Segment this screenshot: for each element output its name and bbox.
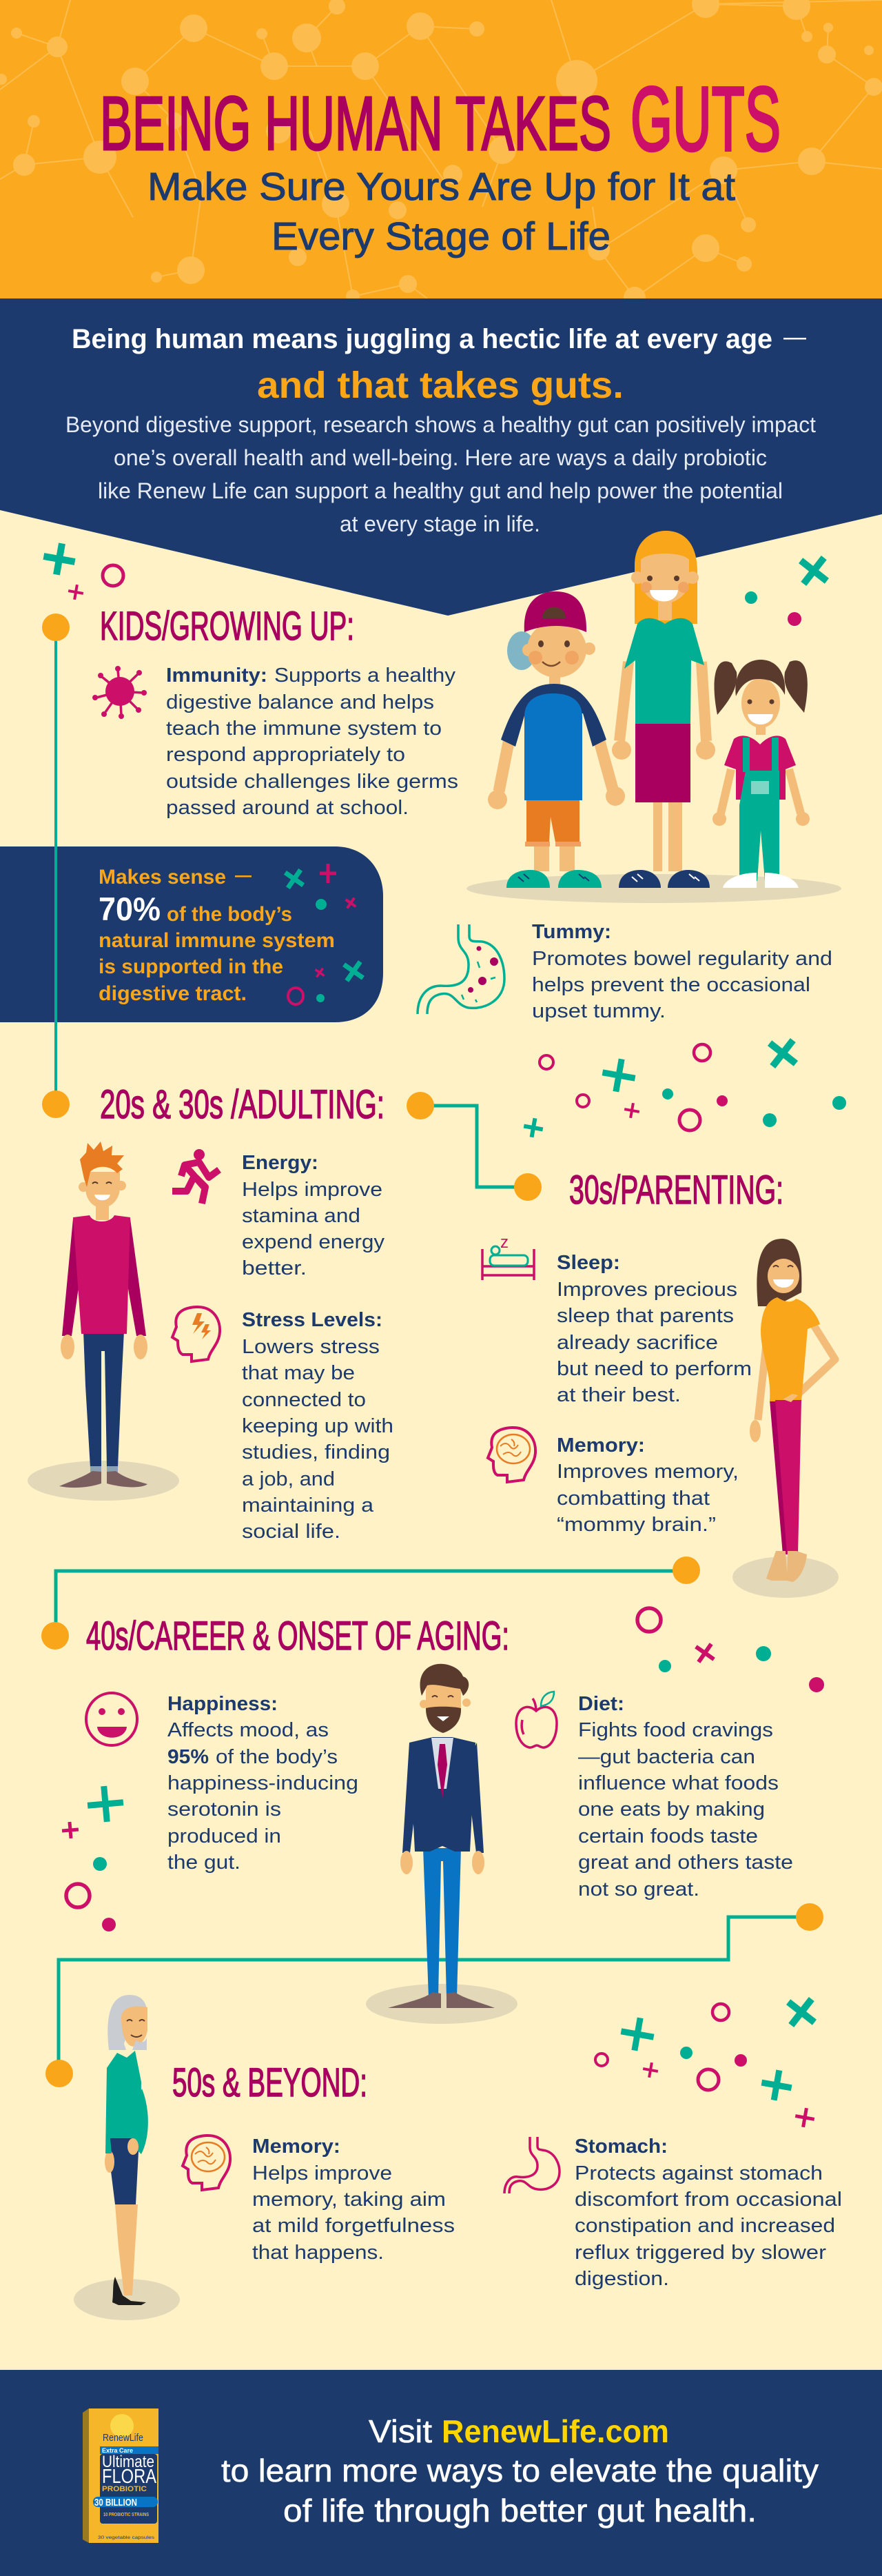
icon: tummy (418, 924, 504, 1014)
text: sleep: Sleep: (557, 1252, 620, 1274)
callout text: Makes sense (99, 866, 226, 889)
text: memory: “mommy brain.” (557, 1514, 716, 1536)
text: immunity: outside challenges like germs (166, 771, 458, 793)
nodes (41, 1556, 823, 1931)
section: 20s and 30s adulting (28, 1082, 434, 1543)
text: immunity: respond appropriately to (166, 744, 405, 766)
text: stress levels: social life. (242, 1521, 340, 1543)
callout text: natural immune system (99, 929, 335, 952)
decorative symbols: top right (745, 547, 837, 626)
node (42, 613, 70, 641)
text: happiness: Happiness: (167, 1693, 278, 1715)
text: diet (578, 1693, 793, 1900)
text: stomach: constipation and increased (575, 2215, 835, 2237)
intro paragraph: Beyond digestive support, research shows a healthy gut can positively impact (65, 412, 816, 437)
intro headline: Being human means juggling a hectic life at every age (72, 324, 772, 354)
text: diet: Fights food cravings (578, 1719, 773, 1741)
molecule network background (0, 0, 882, 309)
text: stress levels: studies, finding (242, 1441, 390, 1463)
icon: stomach (504, 2137, 560, 2193)
decorative symbols: left (61, 1785, 125, 1931)
icon: stressed head (172, 1307, 220, 1361)
boy (488, 591, 625, 888)
text: sleep: sleep that parents (557, 1305, 734, 1327)
text: memory (252, 2136, 455, 2264)
text: immunity: teach the immune system to (166, 718, 442, 740)
text: immunity (166, 665, 458, 819)
decorative symbols: right (637, 1608, 824, 1692)
text: happiness (167, 1693, 358, 1874)
text: immunity: Immunity: (166, 665, 267, 687)
icon: germ (92, 666, 147, 719)
text: stress levels: Lowers stress (242, 1336, 380, 1358)
text: stomach (575, 2136, 842, 2290)
subtitle: Make Sure Yours Are Up for It at (147, 165, 735, 209)
heading: KIDS/GROWING UP: (100, 604, 354, 649)
text: stomach: discomfort from occasional (575, 2189, 842, 2211)
intro paragraph: like Renew Life can support a healthy gut and help power the potential (98, 478, 783, 503)
section: 40s career and onset of aging (41, 1556, 824, 2024)
text: energy: Helps improve (242, 1179, 382, 1201)
title: GUTS (630, 68, 781, 170)
text: happiness: serotonin is (167, 1798, 281, 1821)
text: happiness: happiness-inducing (167, 1772, 358, 1794)
text: energy: better. (242, 1257, 307, 1279)
decorative symbols: upper middle (522, 1030, 846, 1139)
intro paragraph: one’s overall health and well-being. Here are ways a daily probiotic (114, 445, 767, 470)
text: immunity: digestive balance and helps (166, 691, 434, 713)
illustration: family (466, 531, 841, 903)
text: stress levels: that may be (242, 1362, 355, 1384)
text: stomach: reflux triggered by slower (575, 2242, 826, 2264)
call to action: to learn more ways to elevate the quality (221, 2453, 819, 2488)
nodes (42, 1091, 434, 1119)
product box (83, 2408, 158, 2543)
text: stress levels: a job, and (242, 1468, 335, 1490)
text: diet: Diet: (578, 1693, 624, 1715)
text: happiness: produced in (167, 1825, 281, 1847)
heading: 40s/CAREER & ONSET OF AGING: (86, 1614, 509, 1659)
icon: running (172, 1149, 219, 1204)
text: memory: Helps improve (252, 2162, 392, 2184)
illustration: mother in orange (732, 1239, 839, 1598)
text: stress levels: connected to (242, 1389, 366, 1411)
text: diet: certain foods taste (578, 1825, 758, 1847)
call to action: of life through better gut health. (283, 2493, 757, 2528)
text: immunity: passed around at school. (166, 797, 409, 819)
callout text (99, 866, 335, 1005)
panel: header banner (0, 0, 882, 309)
callout text: is supported in the (99, 955, 283, 978)
panel: intro (0, 298, 882, 616)
node (514, 1173, 542, 1201)
text: memory: Memory: (557, 1434, 645, 1457)
text: diet: not so great. (578, 1878, 699, 1900)
section: 30s parenting (482, 1168, 839, 1598)
heading: 20s & 30s /ADULTING: (100, 1082, 384, 1127)
product box: 30 BILLION (94, 2497, 137, 2508)
product box: Ultimate (102, 2453, 154, 2471)
text: sleep (557, 1252, 752, 1406)
callout: 70 percent (0, 846, 383, 1022)
product box: 30 vegetable capsules (98, 2536, 154, 2540)
text: energy (242, 1152, 385, 1279)
icon: brain head (183, 2136, 230, 2190)
text: happiness: 95% (167, 1746, 209, 1768)
text: stomach: Protects against stomach (575, 2162, 823, 2184)
call to action: Visit (369, 2413, 432, 2449)
heading: 30s/PARENTING: (569, 1168, 783, 1213)
callout text: digestive tract. (99, 982, 247, 1005)
text: stress levels: maintaining a (242, 1494, 374, 1517)
icon: bed: z (500, 1233, 509, 1252)
subtitle (147, 165, 735, 258)
product box: PROBIOTIC (102, 2485, 147, 2493)
illustration: man in suit (366, 1664, 517, 2024)
text: immunity: Supports a healthy (274, 665, 456, 687)
icon: apple (516, 1692, 557, 1747)
text: sleep: but need to perform (557, 1358, 752, 1380)
callout symbols (279, 864, 370, 1004)
intro paragraph: at every stage in life. (340, 511, 540, 536)
text: happiness: Affects mood, as (167, 1719, 329, 1741)
text: happiness: the gut. (167, 1852, 240, 1874)
text: tummy: upset tummy. (532, 1000, 666, 1022)
text: tummy: helps prevent the occasional (532, 974, 810, 996)
text: sleep: at their best. (557, 1384, 681, 1406)
text: tummy: Tummy: (532, 921, 611, 943)
icon: brain head (488, 1428, 535, 1482)
panel: footer (0, 2370, 882, 2576)
text: stomach: digestion. (575, 2268, 669, 2290)
text: stress levels: Stress Levels: (242, 1309, 382, 1331)
text: energy: Energy: (242, 1152, 318, 1174)
icon: bed (482, 1233, 534, 1280)
text: diet: —gut bacteria can (578, 1746, 755, 1768)
text: memory (557, 1434, 739, 1536)
call to action (221, 2413, 819, 2528)
timeline connector (56, 627, 810, 2073)
decorative symbols: lower right (595, 1989, 825, 2129)
product box: RenewLife (103, 2432, 143, 2444)
icon: smiley (86, 1693, 137, 1745)
decorative symbols: top left (41, 540, 123, 601)
text: memory: that happens. (252, 2242, 384, 2264)
product box: FLORA (102, 2466, 157, 2488)
girl (712, 660, 810, 888)
text: tummy: Promotes bowel regularity and (532, 948, 832, 970)
text: stress levels (242, 1309, 393, 1543)
text: diet: one eats by making (578, 1798, 765, 1821)
section: kids (0, 531, 841, 1022)
text: memory: Improves memory, (557, 1461, 739, 1483)
text: diet: influence what foods (578, 1772, 779, 1794)
intro highlight: and that takes guts. (257, 365, 624, 406)
intro paragraph (65, 412, 816, 536)
text: memory: at mild forgetfulness (252, 2215, 455, 2237)
node (45, 2060, 73, 2087)
text: memory: Memory: (252, 2136, 340, 2158)
text: happiness: of the body’s (216, 1746, 338, 1768)
product box: Extra Care (102, 2447, 133, 2454)
title: BEING HUMAN TAKES (100, 81, 611, 166)
text: diet: great and others taste (578, 1852, 793, 1874)
mother (612, 531, 715, 888)
section: 50s and beyond (45, 1995, 842, 2320)
callout text: of the body’s (167, 903, 292, 926)
heading: 50s & BEYOND: (172, 2060, 367, 2105)
text: memory: memory, taking aim (252, 2189, 446, 2211)
illustration: young man (28, 1142, 179, 1501)
text: sleep: Improves precious (557, 1279, 737, 1301)
illustration: older woman (74, 1995, 180, 2320)
subtitle: Every Stage of Life (271, 214, 611, 258)
callout text: 70% (99, 891, 161, 927)
text: energy: stamina and (242, 1205, 360, 1227)
text: stomach: Stomach: (575, 2136, 668, 2158)
text: sleep: already sacrifice (557, 1332, 718, 1354)
product box: 10 PROBIOTIC STRAINS (103, 2511, 149, 2517)
text: memory: combatting that (557, 1488, 710, 1510)
call to action: RenewLife.com (442, 2413, 669, 2449)
text: stress levels: keeping up with (242, 1415, 393, 1437)
text: energy: expend energy (242, 1231, 385, 1253)
text: tummy (532, 921, 832, 1022)
